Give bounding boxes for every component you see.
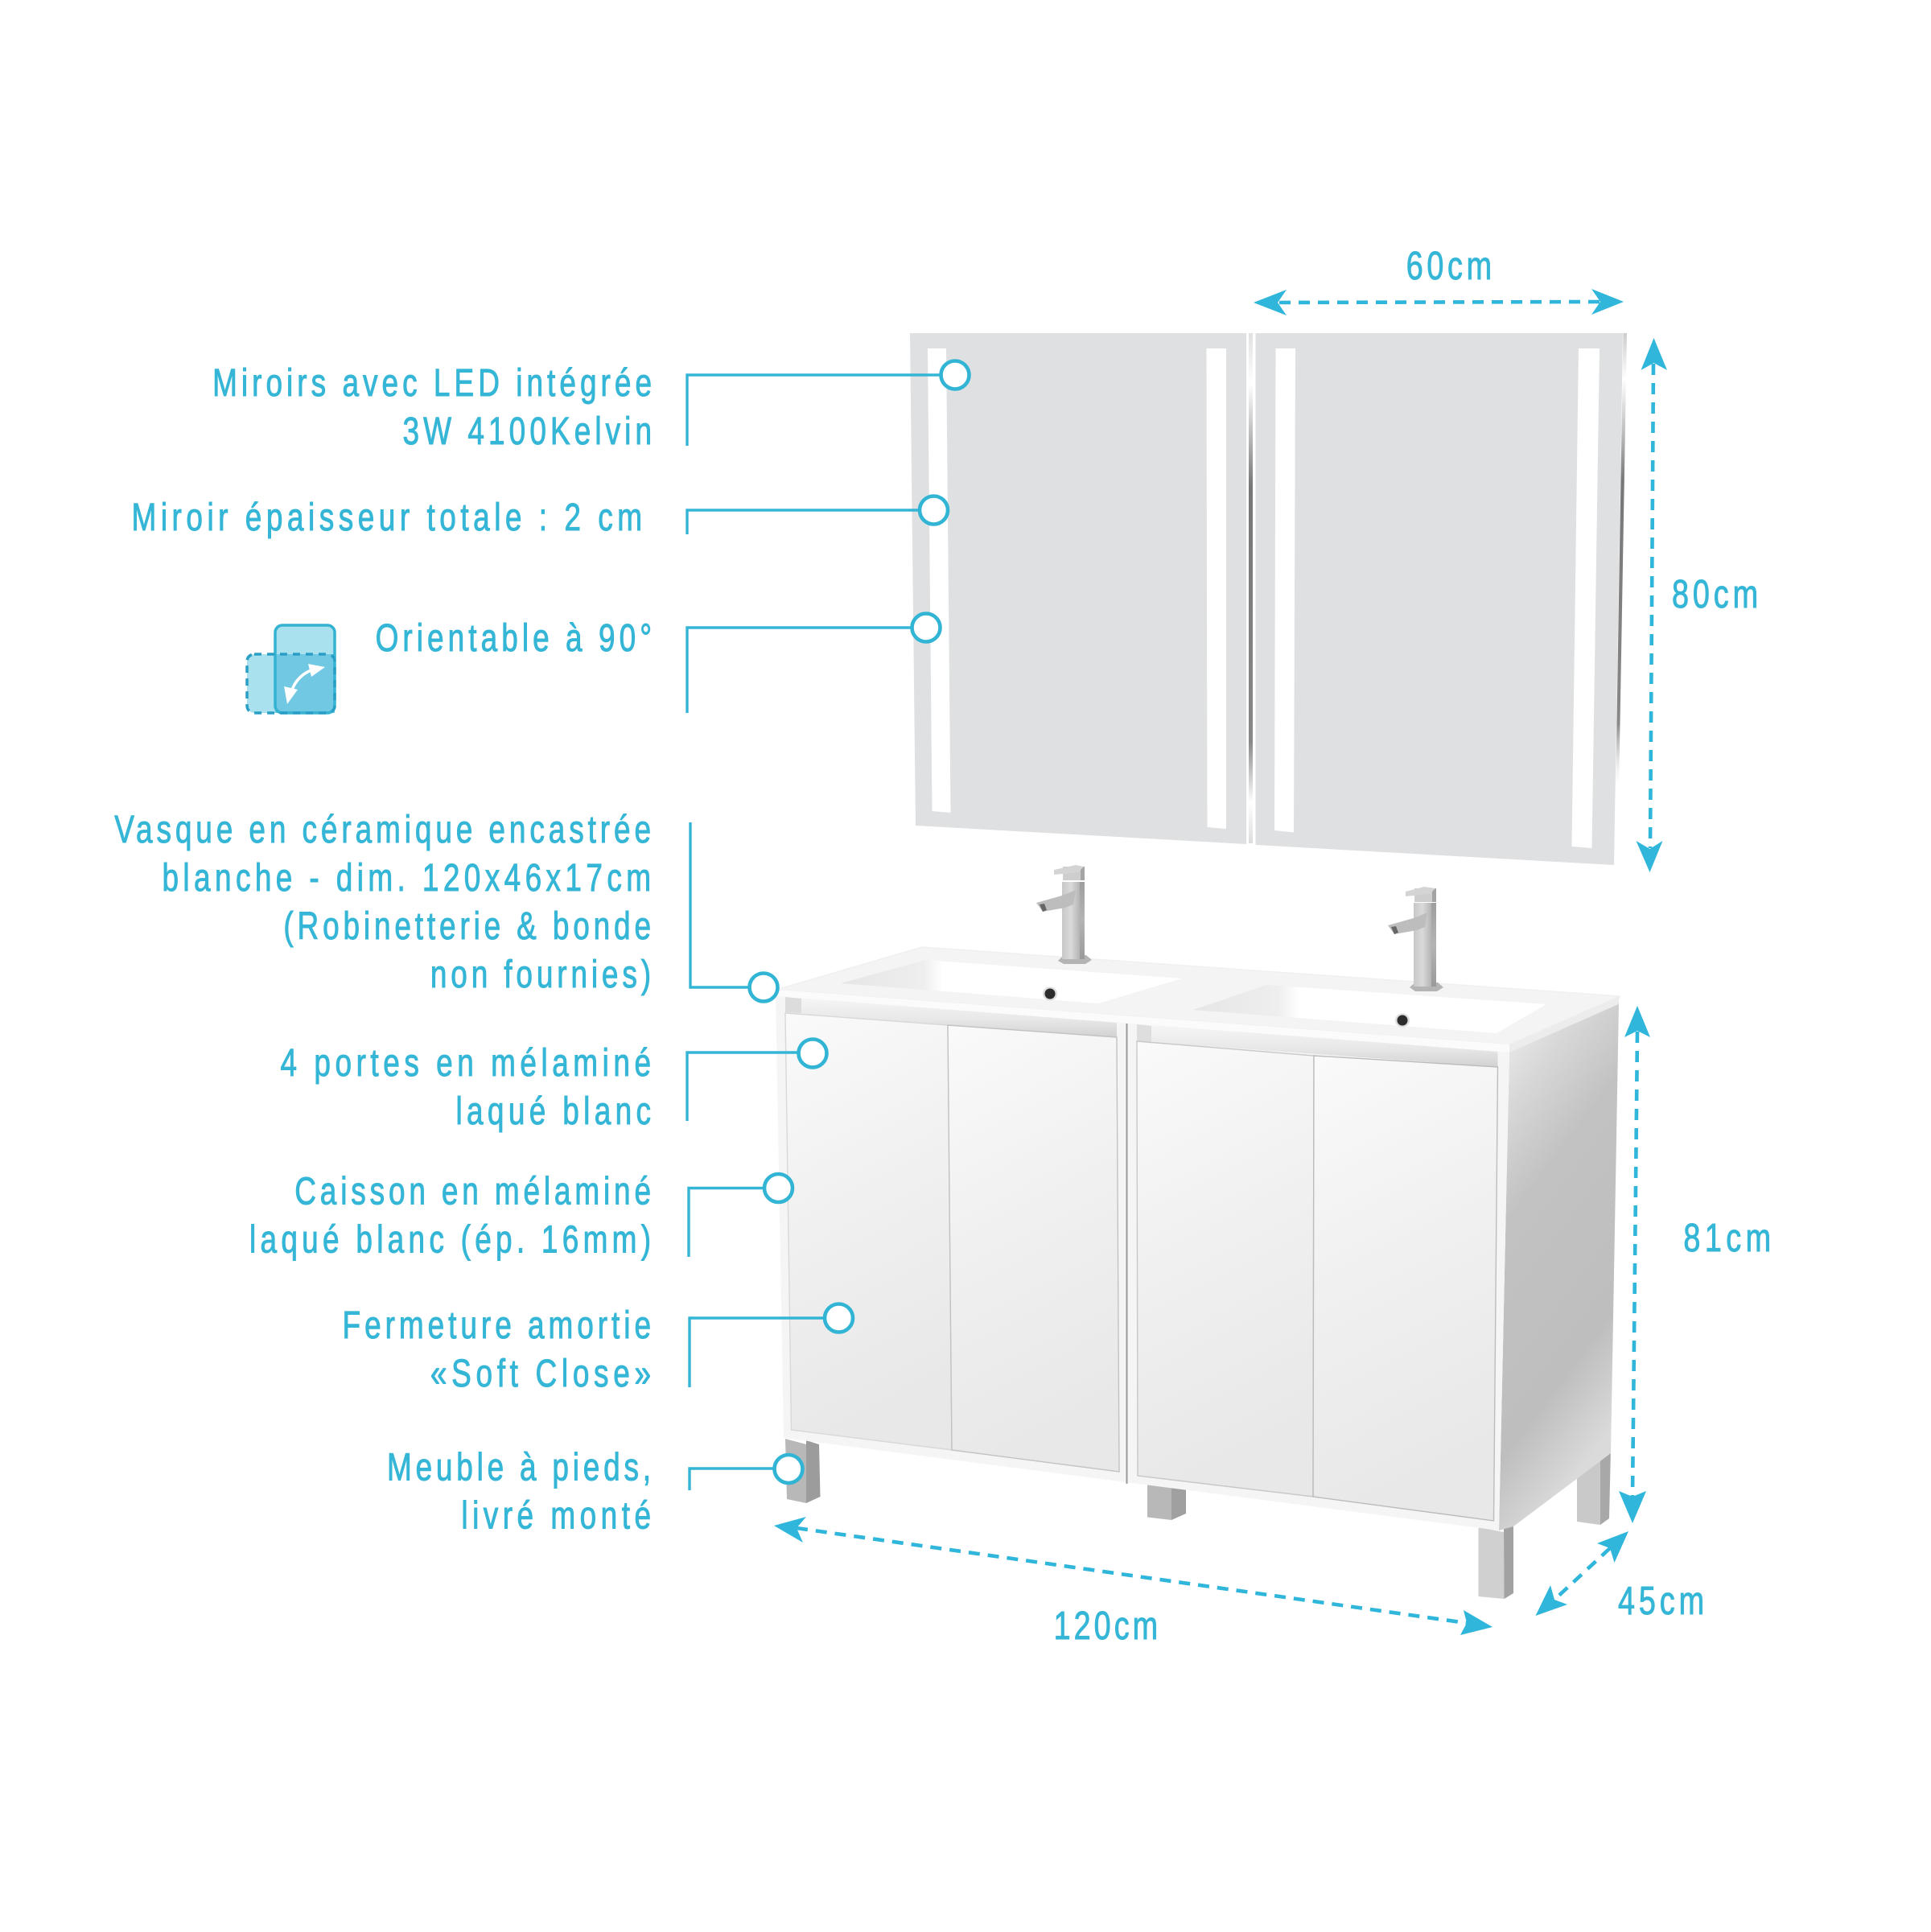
mirror right edge xyxy=(1616,333,1627,793)
middle leg xyxy=(1147,1482,1186,1520)
text: non fournies) xyxy=(430,953,651,996)
text: 4 portes en mélaminé xyxy=(281,1041,651,1085)
mirror gap edge xyxy=(1249,333,1253,843)
leader line xyxy=(687,510,921,534)
left handle recess xyxy=(785,997,1117,1037)
marker xyxy=(941,360,969,389)
text: laqué blanc xyxy=(455,1090,651,1133)
text xyxy=(212,361,652,453)
leader line xyxy=(690,1318,826,1387)
text: Miroirs avec LED intégrée xyxy=(212,361,652,405)
text: (Robinetterie & bonde xyxy=(283,904,651,948)
text xyxy=(249,1170,651,1262)
leader line xyxy=(689,1188,766,1257)
back right leg xyxy=(1577,1440,1611,1525)
LED strip 3 xyxy=(1274,348,1295,832)
LED strip 4 xyxy=(1572,348,1600,848)
text xyxy=(387,1446,651,1538)
marker xyxy=(825,1304,853,1333)
label: 60cm xyxy=(1406,244,1492,288)
text: Miroir épaisseur totale : 2 cm xyxy=(132,496,642,539)
faucet left xyxy=(1036,865,1092,964)
label: 80cm xyxy=(1672,572,1758,616)
door 3 xyxy=(1137,1041,1314,1497)
front right leg xyxy=(1479,1526,1513,1599)
marker xyxy=(912,613,940,642)
marker xyxy=(764,1174,793,1202)
mirrors xyxy=(910,333,1627,865)
right sink xyxy=(1193,985,1546,1033)
arrow xyxy=(1535,1531,1628,1616)
marker xyxy=(798,1040,827,1067)
counter top plane xyxy=(776,947,1620,1044)
right recess block xyxy=(1137,1024,1151,1042)
marker xyxy=(920,496,948,525)
text xyxy=(114,808,651,996)
left sink xyxy=(841,960,1182,1003)
dimension: 80cm xyxy=(1637,338,1758,872)
right drain xyxy=(1395,1014,1410,1027)
label: 81cm xyxy=(1683,1216,1771,1260)
text: 3W 4100Kelvin xyxy=(402,410,652,453)
text xyxy=(281,1041,651,1133)
cabinet side panel xyxy=(1499,1003,1619,1530)
leader line xyxy=(687,1053,801,1121)
cabinet front frame xyxy=(776,995,1509,1530)
text: Fermeture amortie xyxy=(343,1304,651,1347)
leader line xyxy=(687,375,941,446)
marker xyxy=(774,1455,803,1483)
leader line xyxy=(687,628,914,713)
countertop basin xyxy=(776,947,1620,1053)
text: Meuble à pieds, xyxy=(387,1446,651,1489)
leader line xyxy=(690,1469,776,1490)
dimension: 60cm xyxy=(1254,244,1624,315)
arrow xyxy=(774,1517,1493,1635)
callout: miroirs LED xyxy=(212,360,969,453)
faucet right xyxy=(1388,887,1443,991)
text: Orientable à 90° xyxy=(376,616,652,660)
leader line xyxy=(690,822,751,987)
text: Caisson en mélaminé xyxy=(294,1170,651,1213)
text: blanche - dim. 120x46x17cm xyxy=(162,856,651,900)
callout: fermeture xyxy=(343,1304,853,1395)
right handle recess xyxy=(1137,1024,1498,1067)
door 4 xyxy=(1313,1056,1498,1521)
text: «Soft Close» xyxy=(430,1352,651,1395)
counter right edge xyxy=(1509,996,1620,1053)
door 2 xyxy=(948,1025,1119,1472)
callout: caisson xyxy=(249,1170,793,1262)
arrow xyxy=(1637,338,1667,872)
callout: vasque xyxy=(114,808,777,1001)
left drain xyxy=(1043,987,1057,1001)
counter front band xyxy=(776,990,1509,1053)
front left leg xyxy=(785,1439,821,1503)
callout: épaisseur xyxy=(132,496,948,539)
mirror right xyxy=(1255,333,1623,865)
dimension: 120cm xyxy=(774,1517,1493,1648)
mirror left xyxy=(910,333,1246,844)
callout: pieds xyxy=(387,1446,803,1538)
dimension: 81cm xyxy=(1619,1006,1771,1523)
text: livré monté xyxy=(461,1494,651,1538)
cabinet centre divider xyxy=(1126,1024,1128,1484)
dimension: 45cm xyxy=(1535,1531,1704,1623)
icon: mirror rotation xyxy=(247,625,335,713)
LED strip 2 xyxy=(1207,348,1226,829)
cabinet xyxy=(776,995,1619,1530)
arrow xyxy=(1619,1006,1650,1523)
label: 45cm xyxy=(1618,1579,1704,1623)
callout: orientable xyxy=(376,613,940,713)
door 1 xyxy=(785,1013,952,1450)
marker xyxy=(750,974,777,1001)
left recess block xyxy=(785,997,801,1013)
text: laqué blanc (ép. 16mm) xyxy=(249,1218,651,1262)
label: 120cm xyxy=(1054,1604,1158,1648)
arrow xyxy=(1254,289,1624,315)
text: Vasque en céramique encastrée xyxy=(114,808,651,851)
callout: portes xyxy=(281,1040,827,1133)
LED strip 1 xyxy=(928,348,951,813)
text xyxy=(343,1304,651,1395)
